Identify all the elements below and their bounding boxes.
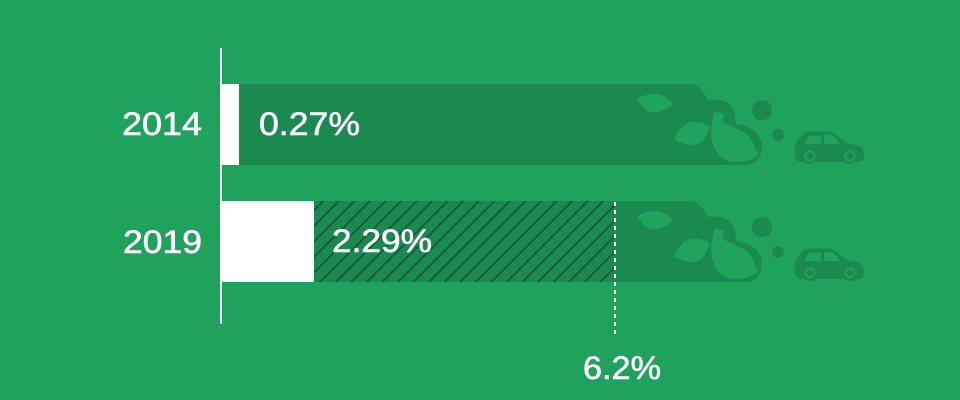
- bar: 2014 target with leaves and car: [239, 84, 864, 165]
- bar: 2014 value: [221, 84, 239, 165]
- value: 2.29%: 2.29%: [332, 223, 432, 259]
- bar: 2019 target with leaves and car: [239, 201, 864, 282]
- value: 6.2%: 6.2%: [583, 350, 661, 386]
- bar: 2019 value: [221, 201, 314, 282]
- value: 0.27%: 0.27%: [259, 106, 360, 142]
- bar: 2019 hatched share: [314, 201, 615, 282]
- axis line: [220, 48, 222, 324]
- target marker line: [614, 202, 616, 334]
- label: 2014: 2014: [122, 106, 202, 142]
- label: 2019: 2019: [123, 224, 202, 260]
